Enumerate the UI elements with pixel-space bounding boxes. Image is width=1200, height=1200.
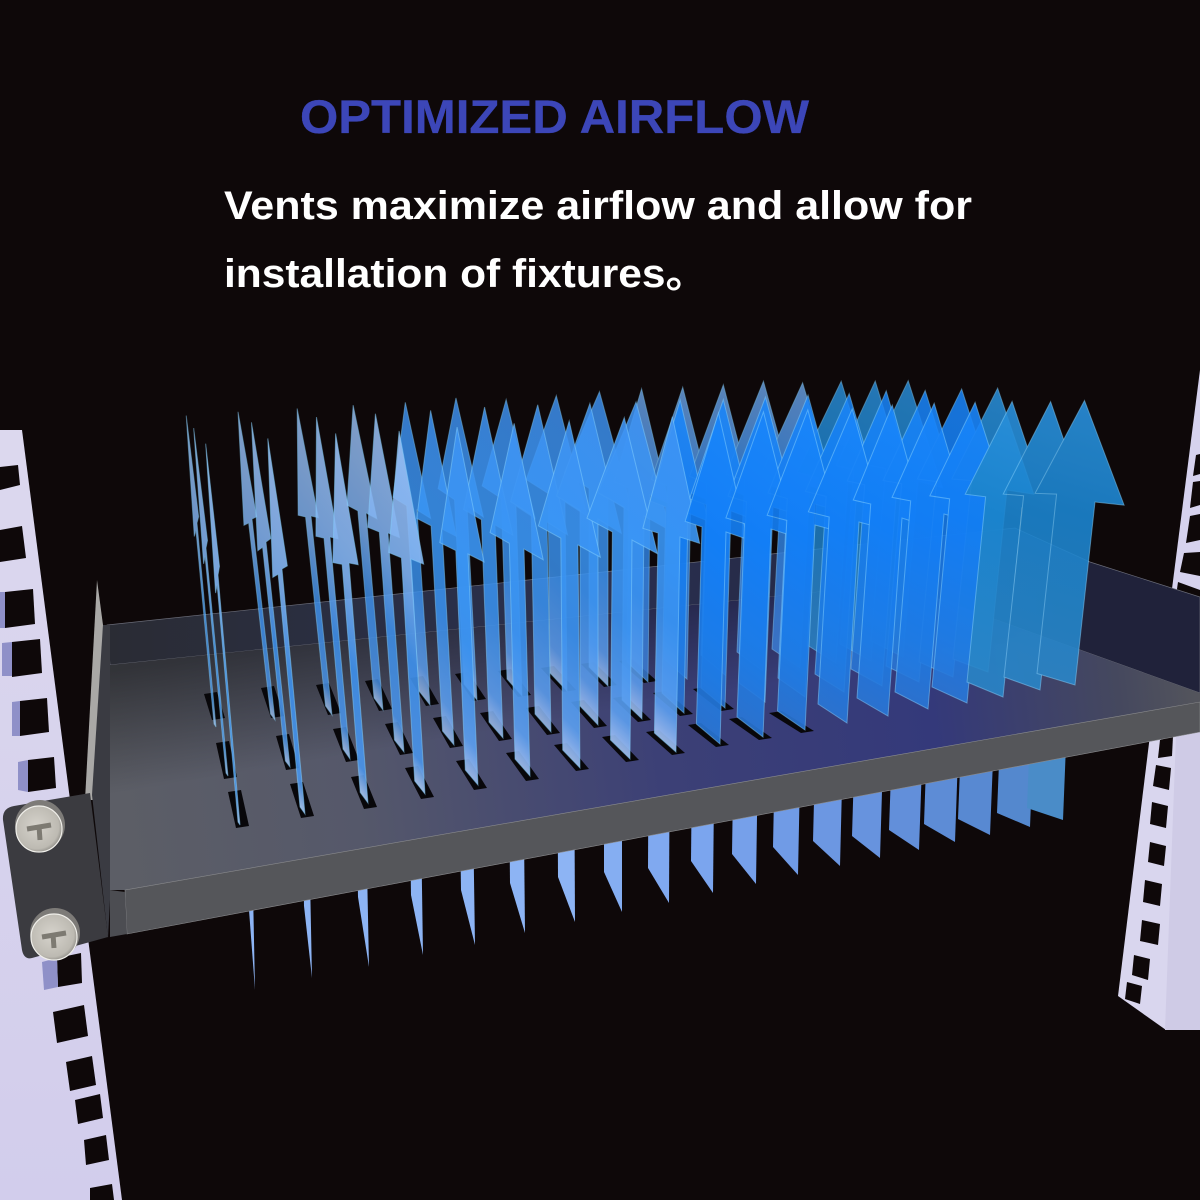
- airflow arrows middle row: [190, 367, 1043, 780]
- left mounting bracket: [3, 580, 110, 960]
- airflow arrow tails below the shelf: [245, 608, 1071, 990]
- screw bottom: [30, 908, 80, 960]
- flange edge: [92, 625, 110, 938]
- side flange sliver: [85, 580, 103, 800]
- shelf front lip: [125, 702, 1200, 934]
- screw top: [15, 800, 65, 852]
- description text: installation of fixtures。: [224, 252, 708, 296]
- shelf floor: [110, 584, 1200, 890]
- bracket ear plate: [3, 793, 108, 958]
- floor vent slots: [204, 659, 814, 828]
- right rack post lower: [1118, 730, 1200, 1030]
- airflow arrows front row: [202, 382, 1134, 829]
- title: OPTIMIZED AIRFLOW: [300, 90, 810, 143]
- airflow arrows back row: [183, 357, 950, 731]
- left rack post: [0, 430, 122, 1200]
- right rack post upper: [1168, 370, 1200, 620]
- shelf left side flange: [110, 890, 127, 937]
- description text: Vents maximize airflow and allow for: [224, 184, 972, 228]
- floor shading near back wall: [110, 584, 1200, 890]
- shelf: [107, 528, 1200, 937]
- description text: [224, 184, 972, 296]
- shelf back wall: [107, 528, 1200, 693]
